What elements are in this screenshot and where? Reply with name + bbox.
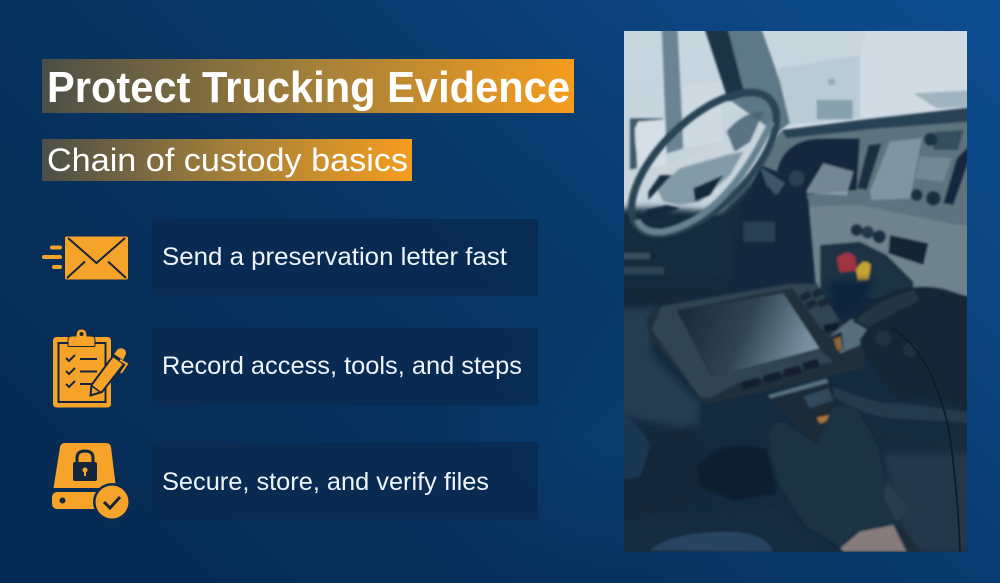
steering wheel bbox=[657, 152, 743, 205]
diagnostic cable bbox=[892, 328, 960, 552]
steering column bbox=[730, 165, 817, 297]
photo: technician connecting diagnostic device in truck cab bbox=[624, 31, 967, 552]
panel: letter text row: Send a preservation letter fast bbox=[162, 243, 507, 271]
icon: envelope with speed lines bbox=[42, 236, 128, 280]
upper right glove bbox=[853, 287, 977, 408]
panel: secure text row: Secure, store, and verify files bbox=[162, 468, 489, 496]
item: send a preservation letter bbox=[42, 219, 538, 296]
item: secure and verify bbox=[52, 442, 538, 521]
panel: record text row: Record access, tools, and steps bbox=[162, 352, 522, 380]
photo: lower device and gloved hands bbox=[610, 280, 977, 552]
panel: secure text row bbox=[152, 442, 538, 520]
photo: upper cab view bbox=[608, 25, 977, 297]
panel: record text row bbox=[152, 328, 538, 406]
lower glove bbox=[768, 405, 900, 547]
dash and console bbox=[760, 107, 977, 297]
title: Protect Trucking Evidence bbox=[47, 63, 570, 112]
icon: locked drive with check bbox=[52, 443, 131, 521]
panel: letter text row bbox=[152, 219, 538, 296]
right connector bbox=[829, 318, 868, 353]
lower connector bbox=[767, 378, 837, 443]
item: record access bbox=[53, 328, 538, 408]
icon: clipboard and pen bbox=[53, 329, 127, 408]
subtitle: Chain of custody basics bbox=[47, 142, 408, 178]
photo: blue tint overlay bbox=[624, 31, 967, 552]
device body bbox=[647, 282, 867, 404]
